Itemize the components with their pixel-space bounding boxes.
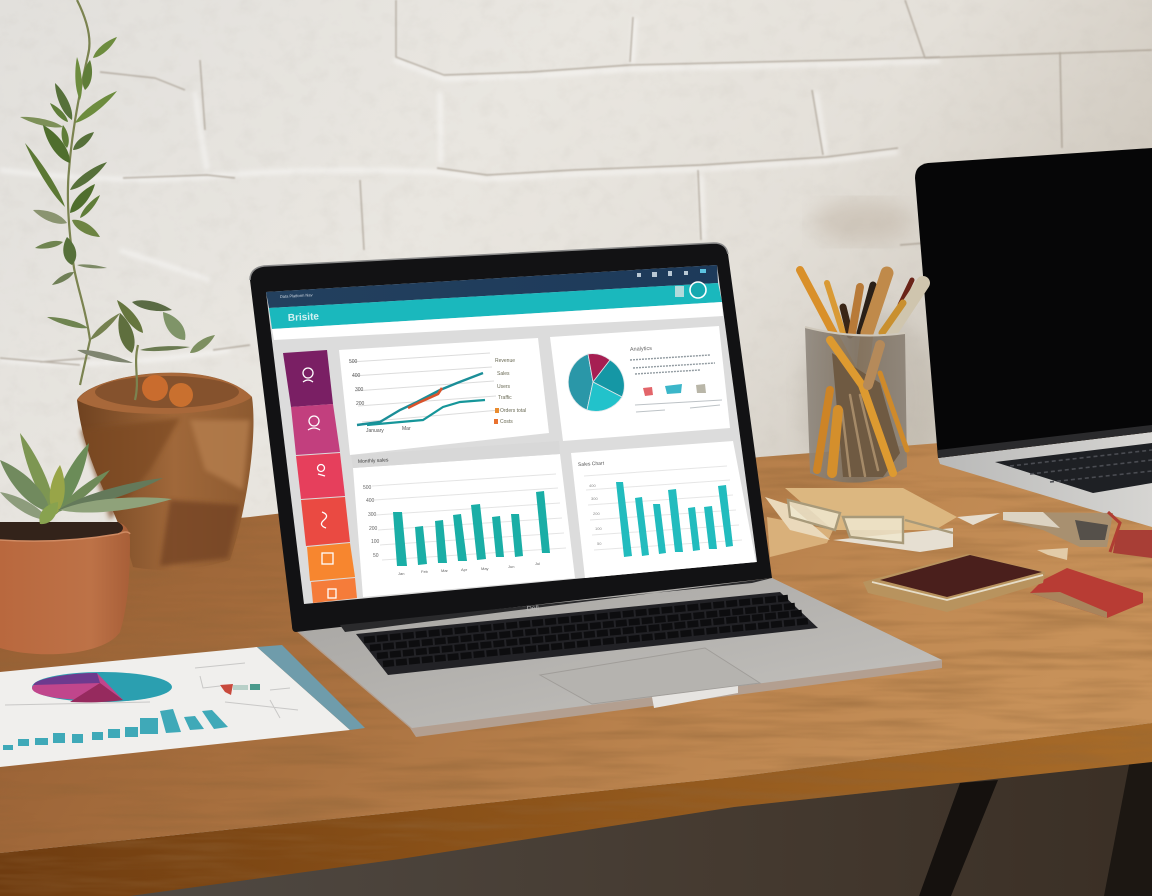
bars bbox=[393, 491, 550, 566]
panel: bar chart left: 50 bbox=[373, 553, 379, 559]
succulent in terracotta pot bbox=[0, 430, 173, 654]
teal header band: Brisite bbox=[288, 311, 320, 324]
laptop base bbox=[295, 578, 942, 737]
chart legend: Revenue bbox=[495, 358, 515, 364]
chart labels: 300 bbox=[355, 387, 364, 393]
panel: bar chart left: Apr bbox=[461, 567, 468, 572]
under-table wall and legs bbox=[100, 745, 1152, 896]
top navigation bar bbox=[266, 265, 718, 308]
chart labels bbox=[349, 359, 411, 434]
chart labels: 500 bbox=[349, 359, 358, 365]
wooden pot bbox=[77, 373, 253, 570]
panel: pie chart bbox=[550, 326, 730, 441]
secondary keyboard bbox=[995, 443, 1152, 493]
chart legend: Costs bbox=[500, 419, 513, 425]
chart labels: January bbox=[366, 428, 384, 434]
panel: bar chart right: 400 bbox=[589, 483, 596, 488]
pencil cup bbox=[800, 270, 923, 483]
panel: bar chart left: Feb bbox=[421, 569, 429, 574]
panel: bar chart left: Jan bbox=[398, 571, 404, 576]
torn papers and red strap at right bbox=[957, 512, 1152, 560]
plant stem bbox=[68, 0, 138, 400]
chart legend bbox=[494, 358, 526, 425]
succulent leaves bbox=[0, 430, 173, 528]
panel: bar chart left: 400 bbox=[366, 498, 375, 504]
bars bbox=[616, 482, 733, 557]
trackpad bbox=[540, 648, 760, 704]
panel: bar chart left bbox=[351, 441, 575, 597]
printed report on desk bbox=[0, 645, 365, 767]
pie bbox=[568, 354, 624, 411]
pencils bbox=[800, 270, 923, 473]
panel: bar chart left: 500 bbox=[363, 485, 372, 491]
panel: bar chart left: Monthly sales bbox=[358, 457, 389, 465]
report pie chart bbox=[32, 672, 172, 702]
panel: bar chart left: 200 bbox=[369, 526, 378, 532]
wooden pot with tall plant bbox=[19, 0, 253, 570]
paper with glasses bbox=[765, 488, 957, 557]
chart legend: Users bbox=[497, 384, 511, 390]
secondary laptop at right bbox=[915, 148, 1152, 527]
keyboard bbox=[356, 592, 818, 675]
glasses bbox=[788, 500, 953, 543]
panel: bar chart right: 100 bbox=[595, 526, 602, 531]
chart labels: Mar bbox=[402, 426, 411, 432]
white toolbar strip bbox=[272, 302, 723, 340]
sidebar icons bbox=[283, 350, 357, 603]
red case bbox=[1030, 568, 1143, 618]
brick wall background bbox=[0, 0, 1152, 560]
wallet bbox=[863, 554, 1045, 612]
chart labels: 400 bbox=[352, 373, 361, 379]
panel: bar chart left: 100 bbox=[371, 539, 380, 545]
panel: bar chart right: Sales Chart bbox=[578, 461, 605, 468]
panel: bar chart left: May bbox=[481, 566, 489, 571]
panel: bar chart left: Jun bbox=[508, 564, 514, 569]
panel: bar chart right: 50 bbox=[597, 541, 602, 546]
glass cup bbox=[805, 327, 907, 483]
chart labels: 200 bbox=[356, 401, 365, 407]
report bar chart bbox=[3, 709, 228, 750]
terracotta pot bbox=[0, 522, 130, 654]
panel: bar chart right bbox=[571, 441, 756, 578]
panel: bar chart left: 300 bbox=[368, 512, 377, 518]
panel: bar chart right: 200 bbox=[593, 511, 600, 516]
teal header band bbox=[269, 282, 722, 329]
wooden desk bbox=[0, 430, 1152, 896]
plant leaves bbox=[19, 34, 217, 366]
panel: bar chart left: Jul bbox=[535, 561, 540, 566]
panel: bar chart right: 300 bbox=[591, 496, 598, 501]
screen bbox=[266, 265, 757, 604]
pie description text: Analytics bbox=[630, 346, 652, 353]
brand label: Dell bbox=[527, 605, 540, 613]
chart legend: Sales bbox=[497, 371, 510, 377]
phone wallet and red case bbox=[863, 554, 1143, 618]
chart legend: Traffic bbox=[498, 395, 512, 401]
secondary screen bbox=[915, 148, 1152, 458]
panel: line chart bbox=[339, 338, 549, 455]
panel: bar chart left: Mar bbox=[441, 568, 449, 573]
main laptop bbox=[250, 243, 942, 737]
line series bbox=[357, 373, 483, 425]
top navigation bar: Data Platform Nav bbox=[280, 292, 313, 299]
chart legend: Orders total bbox=[500, 408, 526, 414]
laptop lid bbox=[250, 243, 772, 632]
cup contents bbox=[832, 353, 900, 477]
